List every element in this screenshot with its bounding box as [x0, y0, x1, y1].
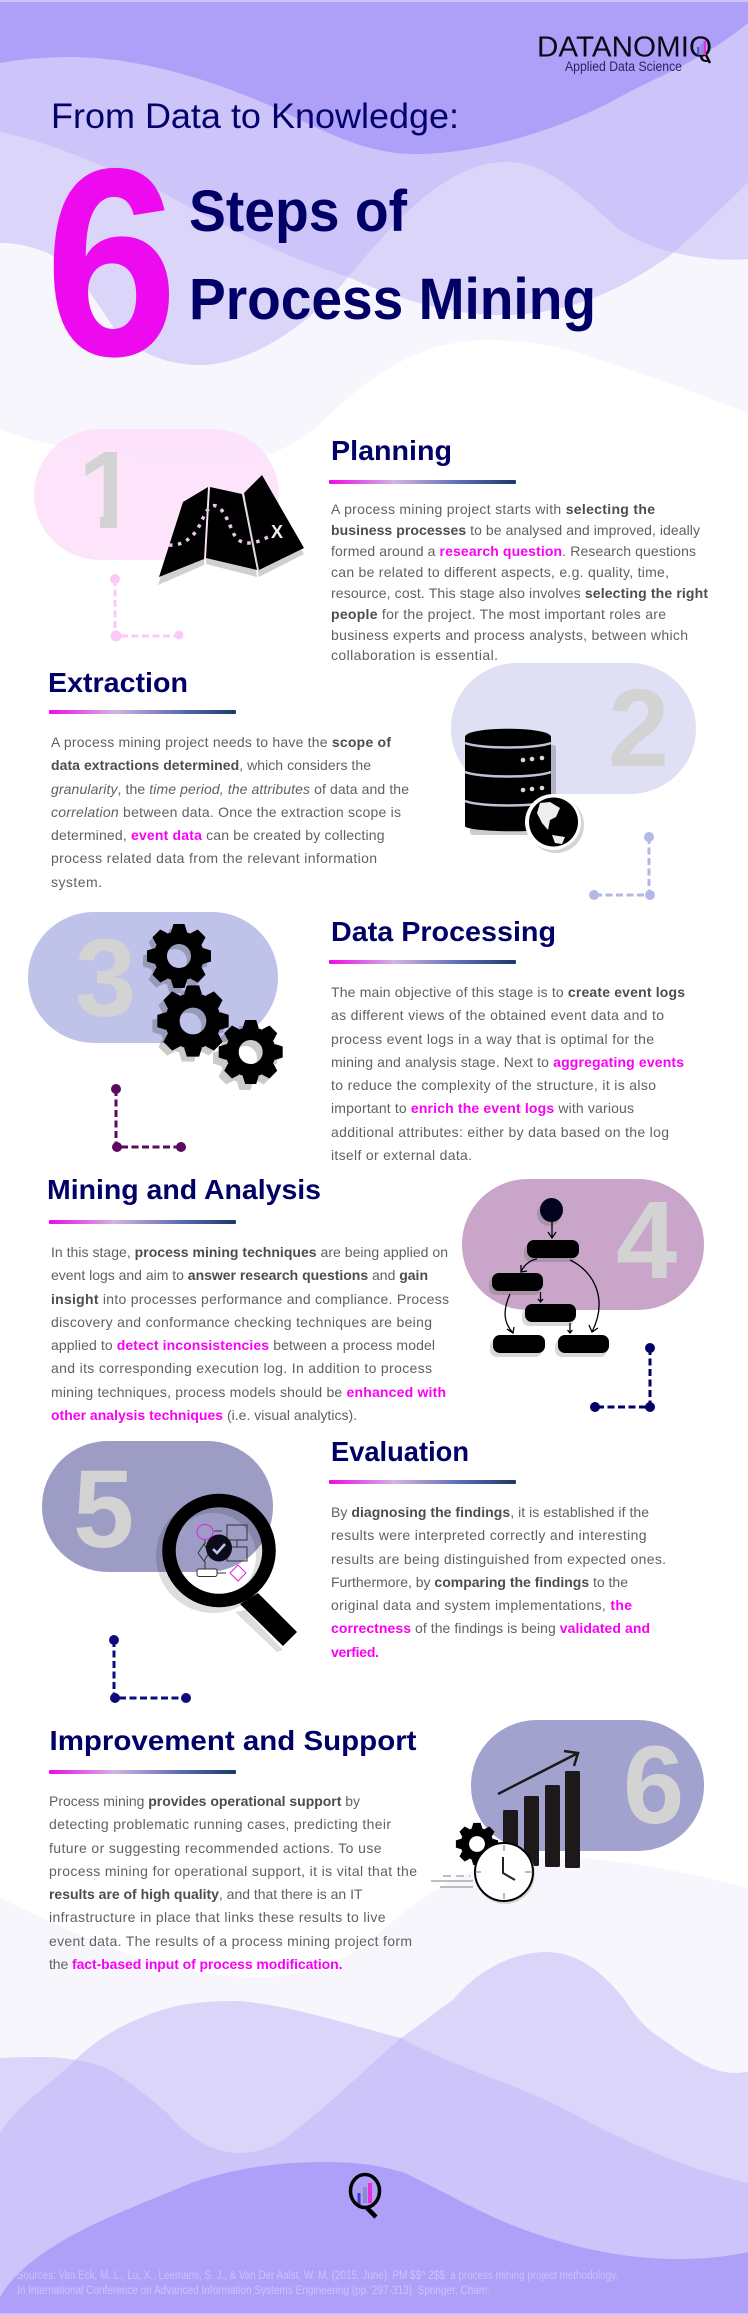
underline	[329, 960, 516, 964]
title: Process Mining: Process Mining	[189, 267, 596, 332]
text block: improvement and support: infrastructure in place that links these results to live	[49, 1909, 386, 1925]
step number 3: 3	[75, 917, 136, 1040]
text block: extraction: granularity, the time period, the attributes of data and the	[51, 781, 409, 797]
heading: Evaluation: Evaluation	[331, 1436, 469, 1467]
text block: planning: resource, cost. This stage also involves selecting the right	[331, 585, 708, 601]
text block: data processing: itself or external data.	[331, 1147, 472, 1163]
text block: evaluation: Furthermore, by comparing the findings to the	[331, 1574, 628, 1590]
icon: process flow	[489, 1198, 609, 1357]
text block: extraction: system.	[51, 874, 102, 890]
sources text: Sources: Van Eck, M. L., Lu, X., Leemans, S. J., & Van Der Aalst, W. M. (2015, June). PM $$^ 2$$: a process mining project methodology.	[17, 2270, 618, 2282]
underline	[49, 1770, 236, 1774]
connector	[110, 574, 183, 641]
panel: step 2 graphic	[451, 663, 696, 900]
text block: data processing	[331, 984, 685, 1163]
underline	[329, 480, 516, 484]
text block: evaluation: results were interpreted correctly and interesting	[331, 1527, 646, 1543]
sources text: In International Conference on Advanced Information Systems Engineering (pp. 297-313). Springer, Cham.	[17, 2285, 490, 2297]
text block: extraction: A process mining project needs to have the scope of	[51, 734, 391, 750]
connector	[112, 1084, 186, 1152]
text block: mining and analysis: mining techniques, process models should be enhanced with	[51, 1384, 446, 1400]
text block: planning: can be related to different aspects, e.g. quality, time,	[331, 564, 669, 580]
text block: data processing: additional attributes: either by data based on the log	[331, 1124, 669, 1140]
title: Steps of: Steps of	[189, 179, 408, 244]
text block: planning: collaboration is essential.	[331, 647, 498, 663]
logo: DATANOMIQ: DATANOMIQ	[537, 32, 712, 64]
text block: improvement and support	[49, 1793, 417, 1972]
text block: mining and analysis: and its corresponding execution log. In addition to process	[51, 1360, 432, 1376]
text block: mining and analysis: discovery and conformance checking techniques are being	[51, 1314, 432, 1330]
text block: evaluation: correctness of the findings is being validated and	[331, 1620, 650, 1636]
underline	[329, 1480, 516, 1484]
text block: data processing: to reduce the complexity of the structure, it is also	[331, 1077, 656, 1093]
text block: improvement and support: process mining for operational support, it is vital that the	[49, 1863, 417, 1879]
step number 5: 5	[73, 1448, 134, 1571]
text block: extraction: determined, event data can be created by collecting	[51, 827, 384, 843]
text block: data processing: important to enrich the event logs with various	[331, 1100, 634, 1116]
step 2 blob	[451, 663, 696, 794]
text block: extraction: correlation between data. Once the extraction scope is	[51, 804, 401, 820]
big magenta numeral 6: 6	[45, 112, 178, 412]
text block: mining and analysis: In this stage, process mining techniques are being applied on	[51, 1244, 448, 1260]
heading: Planning: Planning	[331, 435, 452, 466]
text block: data processing: process event logs in a way that is optimal for the	[331, 1031, 654, 1047]
text block: data processing: mining and analysis stage. Next to aggregating events	[331, 1054, 684, 1070]
icon: folded map: X	[271, 522, 283, 542]
text block: improvement and support: detecting problematic running cases, predicting their	[49, 1816, 391, 1832]
text block: improvement and support: event data. The results of a process mining project form	[49, 1933, 412, 1949]
step number 1: 1	[78, 429, 139, 552]
icon: bottom magnifier logo	[350, 2174, 380, 2217]
title line: From Data to Knowledge: From Data to Knowledge:	[51, 97, 459, 136]
panel: step 1 graphic	[34, 429, 304, 641]
text block: evaluation: results are being distinguished from expected ones.	[331, 1551, 666, 1567]
text block: extraction: data extractions determined, which considers the	[51, 757, 371, 773]
text block: mining and analysis: applied to detect inconsistencies between a process model	[51, 1337, 435, 1353]
text block: planning	[331, 501, 708, 663]
step 1 blob	[34, 429, 279, 560]
text block: planning: business processes to be analysed and improved, ideally	[331, 522, 700, 538]
top background waves	[0, 0, 748, 463]
step number 6: 6	[623, 1724, 684, 1847]
text block: mining and analysis: other analysis techniques (i.e. visual analytics).	[51, 1407, 357, 1423]
text block: improvement and support: results are of high quality, and that there is an IT	[49, 1886, 363, 1902]
text block: mining and analysis	[51, 1244, 449, 1423]
underline	[49, 1220, 236, 1224]
connector	[590, 832, 654, 900]
step 6 blob	[471, 1720, 704, 1851]
heading: Improvement and Support: Improvement and Support	[50, 1725, 417, 1756]
text block: data processing: The main objective of this stage is to create event logs	[331, 984, 685, 1000]
text block: mining and analysis: insight into processes performance and compliance. Process	[51, 1291, 449, 1307]
text block: evaluation	[331, 1504, 666, 1660]
logo: DATANOMIQ: Applied Data Science	[565, 58, 682, 74]
text block: evaluation: By diagnosing the findings, it is established if the	[331, 1504, 649, 1520]
text block: evaluation: verfied.	[331, 1644, 379, 1660]
step 5 blob	[42, 1441, 273, 1572]
panel: step 3 graphic	[28, 912, 283, 1152]
step number 2: 2	[608, 667, 669, 790]
text block: planning: people for the project. The most important roles are	[331, 606, 666, 622]
heading: Extraction: Extraction	[48, 667, 188, 698]
sources text	[17, 2270, 618, 2297]
bottom background waves	[0, 1857, 748, 2315]
connector	[110, 1636, 190, 1702]
text block: improvement and support: Process mining provides operational support by	[49, 1793, 360, 1809]
text block: improvement and support: future or suggesting recommended actions. To use	[49, 1840, 382, 1856]
text block: planning: A process mining project starts with selecting the	[331, 501, 655, 517]
underline	[49, 710, 236, 714]
text block: improvement and support: the fact-based input of process modification.	[49, 1956, 342, 1972]
text block: mining and analysis: event logs and aim to answer research questions and gain	[51, 1267, 428, 1283]
step number 4: 4	[616, 1179, 677, 1302]
step 3 blob	[28, 912, 278, 1043]
panel: step 4 graphic	[462, 1179, 704, 1412]
step 4 blob	[462, 1179, 704, 1310]
heading: Data Processing: Data Processing	[331, 916, 556, 947]
icon: magnifying glass	[163, 1500, 297, 1652]
icon: growth chart with clock and gear	[431, 1751, 580, 1904]
text block: data processing: as different views of the obtained event data and to	[331, 1007, 664, 1023]
text block: planning: formed around a research question. Research questions	[331, 543, 696, 559]
icon: folded map	[158, 475, 304, 585]
icon: gears	[143, 924, 283, 1090]
text block: extraction	[51, 734, 409, 890]
text block: evaluation: original data and system implementations, the	[331, 1597, 632, 1613]
icon: database with globe	[465, 729, 584, 853]
text block: extraction: process related data from the relevant information	[51, 850, 377, 866]
heading: Mining and Analysis: Mining and Analysis	[47, 1174, 321, 1205]
panel: step 6 graphic	[431, 1720, 704, 1904]
connector	[590, 1344, 654, 1412]
text block: planning: business experts and process analysts, between which	[331, 627, 688, 643]
panel: step 5 graphic	[42, 1441, 297, 1702]
